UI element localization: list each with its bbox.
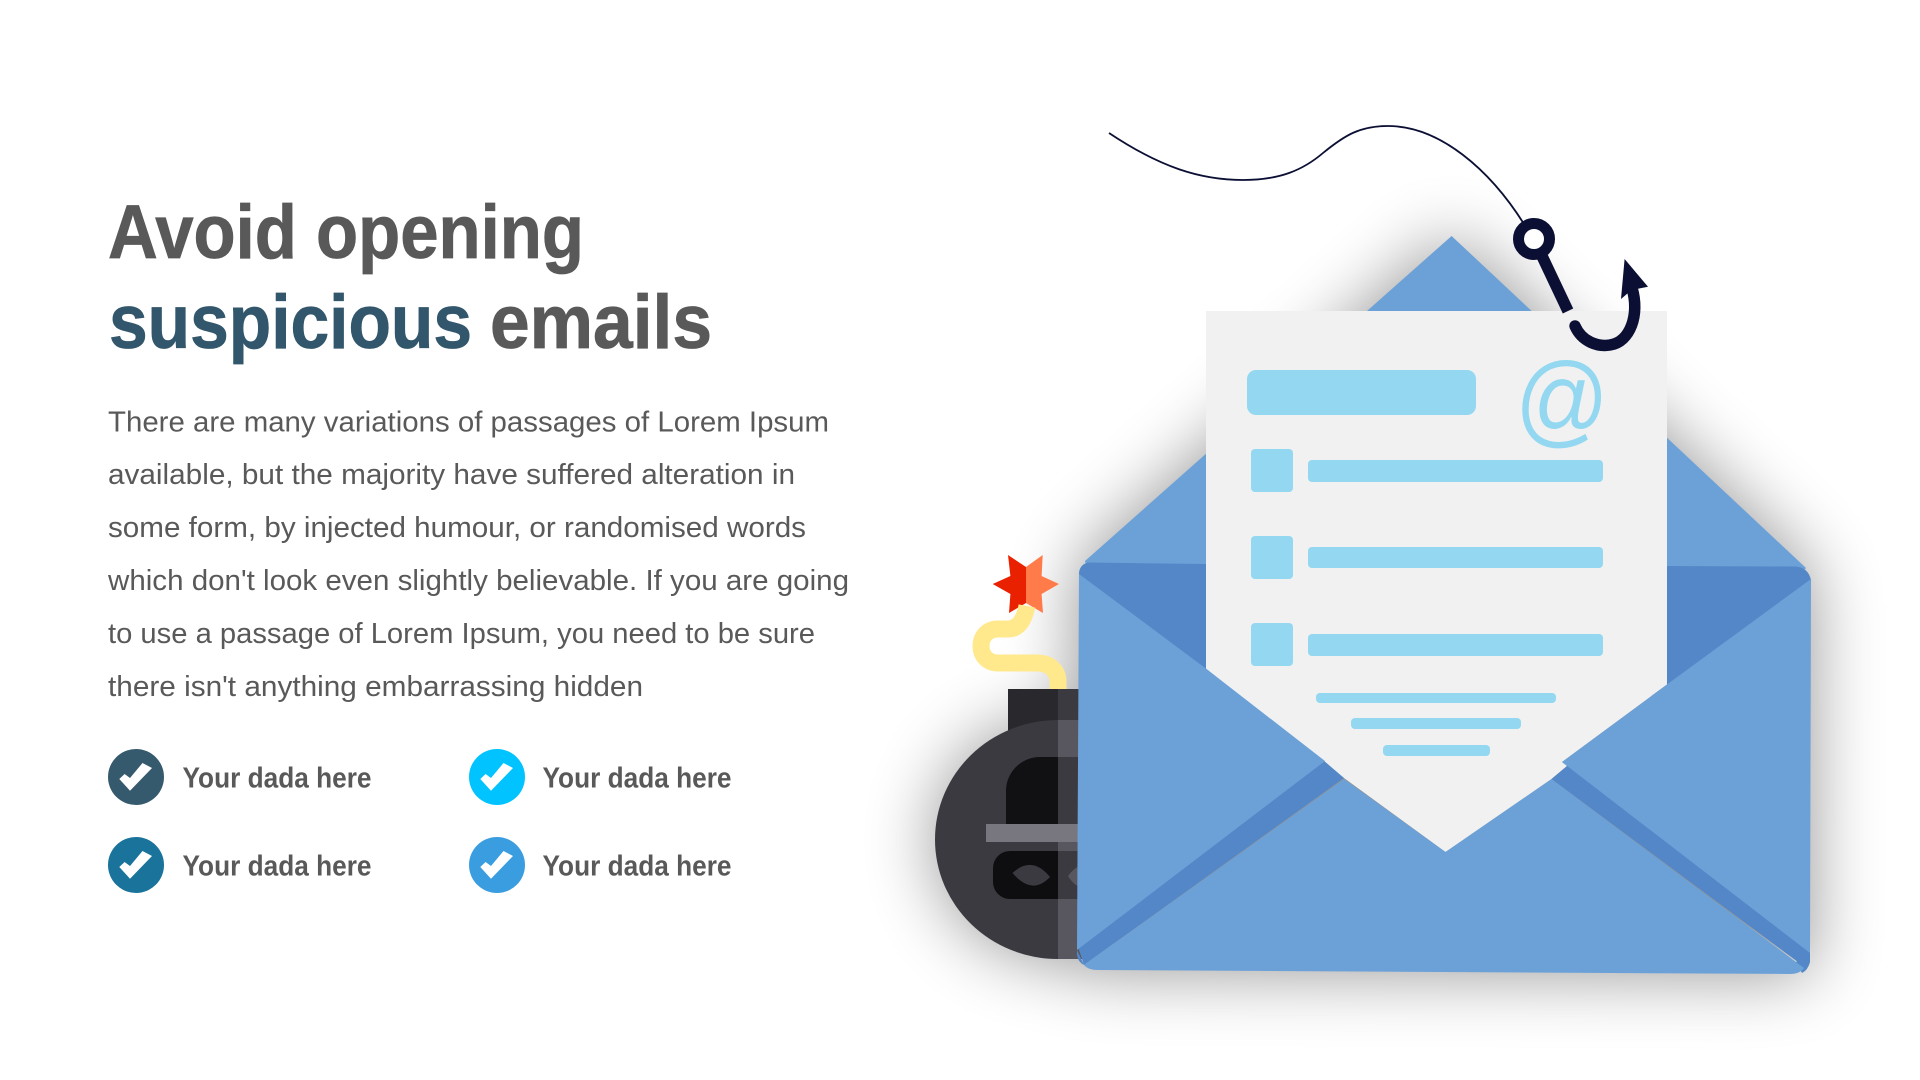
soft shadow [936, 236, 1811, 974]
bottom flap [1084, 779, 1804, 974]
title: emails [490, 280, 712, 365]
check item 1: Your dada here [182, 762, 372, 794]
left flap [1077, 574, 1325, 950]
hook barb [1621, 259, 1648, 299]
body paragraph [107, 406, 849, 703]
body paragraph: which don't look even slightly believable. If you are going [107, 565, 849, 597]
body paragraph: there isn't anything embarrassing hidden [108, 671, 643, 703]
body paragraph: to use a passage of Lorem Ipsum, you need to be sure [108, 618, 815, 650]
checklist [108, 749, 732, 893]
letter header bar [1247, 370, 1476, 415]
title: Avoid opening [108, 190, 584, 275]
check item 4 [469, 837, 732, 893]
list row 2 [1251, 536, 1603, 579]
check item 2: Your dada here [542, 762, 732, 794]
letter [1206, 311, 1667, 852]
fishing line [1109, 126, 1524, 224]
icon: fish hook [1518, 224, 1648, 345]
bomb cap [1008, 689, 1058, 734]
list row 3 [1251, 623, 1603, 666]
right flap [1562, 579, 1811, 953]
hook shank [1542, 256, 1568, 311]
back flap [1085, 236, 1806, 580]
check item 3: Your dada here [182, 850, 372, 882]
bomb fuse [981, 606, 1058, 692]
check item 3 [108, 837, 372, 893]
envelope interior [1079, 562, 1811, 700]
body paragraph: available, but the majority have suffered alteration in [108, 459, 795, 491]
body paragraph: some form, by injected humour, or randomised words [108, 512, 806, 544]
bomb mask [993, 851, 1058, 899]
right corner detail [1796, 952, 1810, 973]
hook ring [1518, 224, 1550, 254]
hook curve [1575, 288, 1635, 345]
title [108, 190, 712, 365]
bomb helmet [1006, 757, 1058, 824]
left corner detail [1077, 950, 1084, 965]
illustration: envelope [1077, 236, 1811, 974]
icon: bomb [935, 555, 1090, 959]
right fold shadow strip [1552, 761, 1810, 968]
body paragraph: There are many variations of passages of Lorem Ipsum [108, 406, 829, 438]
bomb body [935, 720, 1058, 959]
bomb band [986, 824, 1086, 842]
check item 1 [108, 749, 372, 805]
at sign: @ [1515, 342, 1609, 456]
left fold shadow strip [1077, 760, 1344, 965]
check item 2 [469, 749, 732, 805]
title: suspicious [109, 280, 472, 365]
bomb spark [993, 555, 1059, 613]
footer lines [1316, 693, 1556, 756]
list row 1 [1251, 449, 1603, 492]
check item 4: Your dada here [542, 850, 732, 882]
